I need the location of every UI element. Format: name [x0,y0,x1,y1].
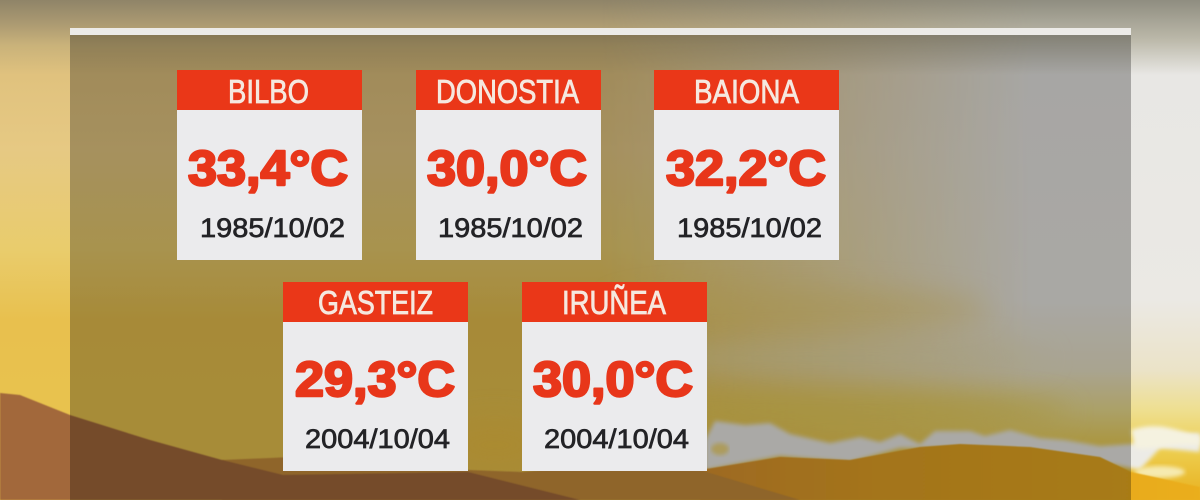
card: Donostia [416,70,601,260]
card: Bilbo: 33,4°C [188,142,348,196]
card: Baiona: 1985/10/02 [677,213,822,243]
card: Iruñea: 30,0°C [533,353,693,407]
card: Iruñea: IRUÑEA [562,284,666,321]
card: Donostia: 1985/10/02 [438,213,583,243]
card: Donostia: 30,0°C [427,142,587,196]
card: Gasteiz [283,282,468,471]
card: Baiona [654,70,839,260]
card: Bilbo [177,70,362,260]
card: Gasteiz: 2004/10/04 [305,424,450,454]
card: Baiona: BAIONA [694,73,799,110]
card: Gasteiz: GASTEIZ [318,284,433,321]
card: Iruñea: 2004/10/04 [544,424,689,454]
panel top white bar [70,28,1131,35]
card: Iruñea [522,282,707,471]
card: Gasteiz: 29,3°C [295,353,455,407]
card: Bilbo: BILBO [228,73,309,110]
card: Donostia: DONOSTIA [436,73,579,110]
card: Bilbo: 1985/10/02 [200,213,345,243]
card: Baiona: 32,2°C [666,142,826,196]
